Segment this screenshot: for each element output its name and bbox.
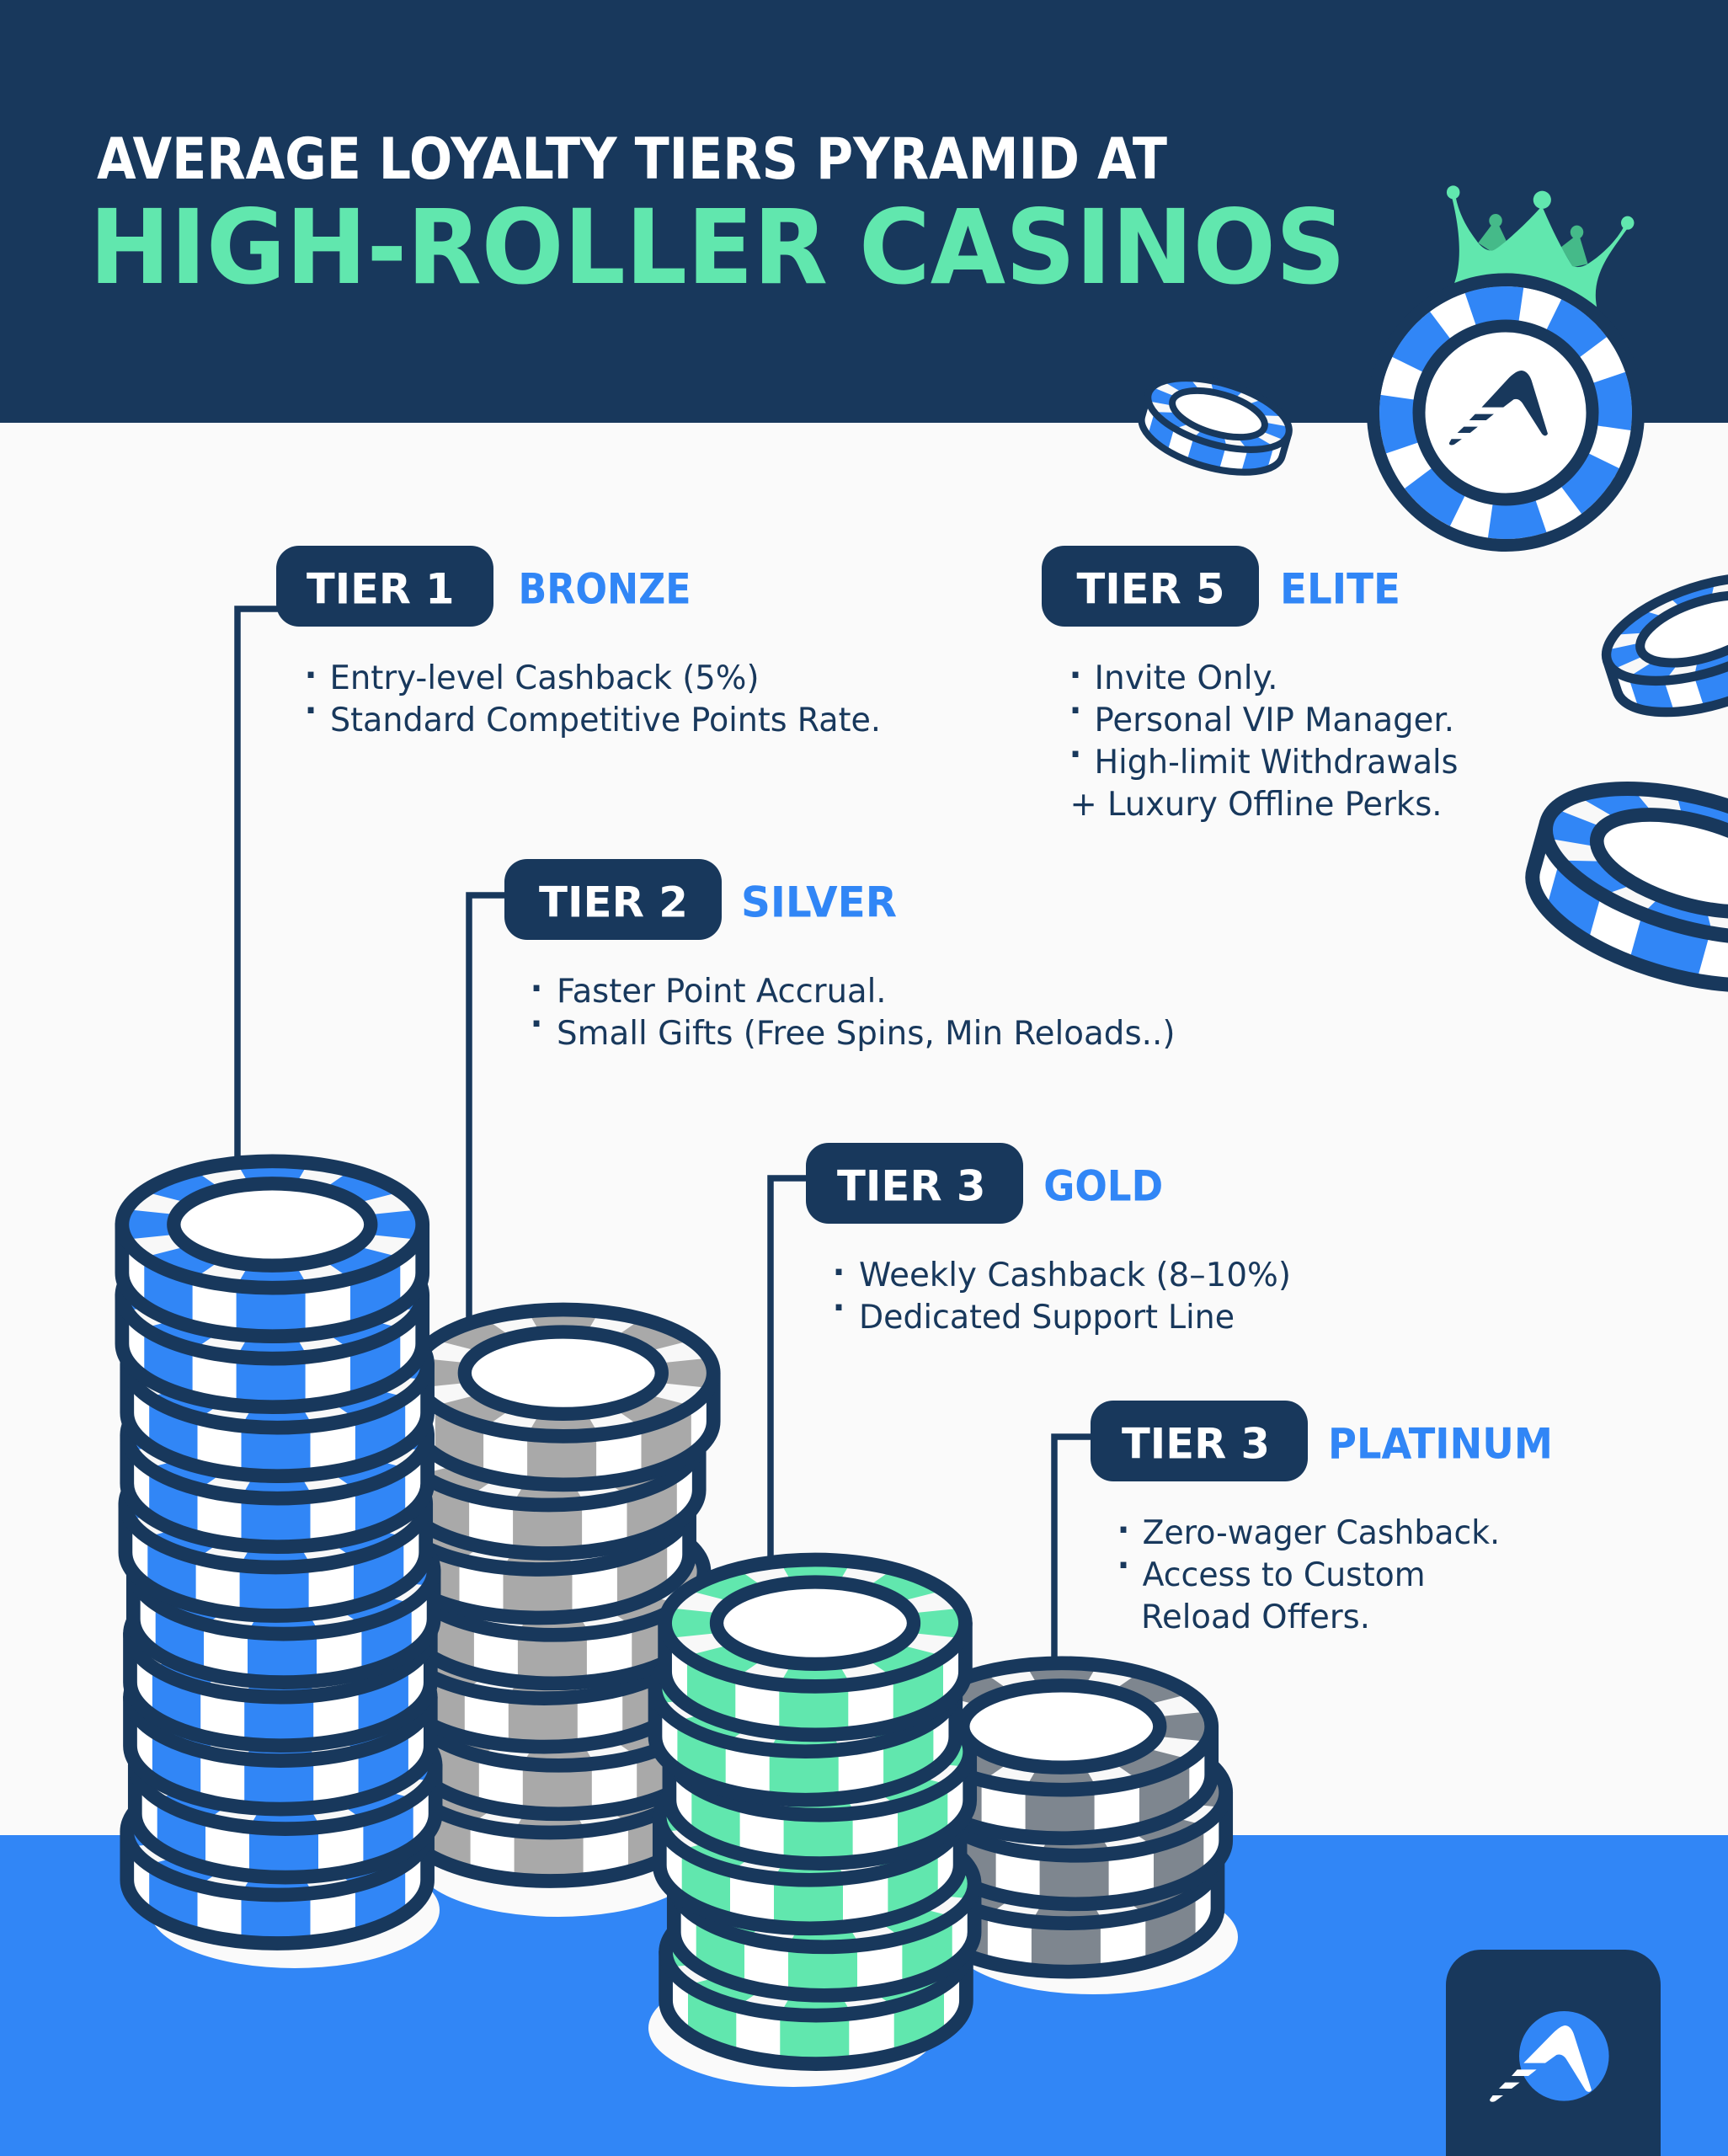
icon: lower right flying chip — [1514, 760, 1728, 1020]
shadow: bronze stack — [150, 1852, 440, 1968]
title — [89, 126, 1346, 307]
panel: tier 1 bronze — [276, 546, 881, 739]
benefits list: gold: Dedicated Support Line — [859, 1299, 1235, 1337]
badge label: tier 5: TIER 5 — [1076, 565, 1224, 614]
panel: tier 3 gold — [806, 1143, 1291, 1337]
badge label: tier 3 platinum: TIER 3 — [1122, 1420, 1270, 1469]
benefits list: silver: Faster Point Accrual. — [557, 973, 886, 1011]
benefits list: gold: · — [833, 1289, 845, 1327]
benefits list: gold: · — [833, 1254, 845, 1292]
badge: tier 3 platinum — [1091, 1401, 1308, 1481]
benefits list: silver: · — [531, 1006, 542, 1043]
connector: tier 3 gold — [771, 1178, 813, 1566]
tier name: gold: GOLD — [1043, 1162, 1163, 1211]
chip stack: bronze — [122, 1161, 435, 1950]
tier name: elite: ELITE — [1280, 565, 1400, 614]
panel: tier 2 silver — [504, 859, 1176, 1053]
badge: tier 5 — [1042, 546, 1259, 627]
chip stack: platinum — [911, 1663, 1226, 1977]
benefits list: platinum: Reload Offers. — [1141, 1598, 1370, 1636]
benefits list: bronze: · — [305, 657, 317, 695]
benefits list: silver — [531, 970, 1176, 1053]
benefits list: elite: Invite Only. — [1095, 659, 1278, 697]
icon: small flying chip — [1133, 365, 1297, 489]
badge label: tier 2: TIER 2 — [539, 878, 688, 927]
benefits list: silver: · — [531, 970, 542, 1008]
tier name: platinum: PLATINUM — [1328, 1420, 1553, 1469]
benefits list: elite: High-limit Withdrawals — [1095, 744, 1459, 782]
tier name: silver: SILVER — [741, 878, 897, 927]
benefits list: elite: · — [1069, 736, 1081, 774]
title line 2: CASINOS — [859, 188, 1346, 307]
blue ground band — [0, 1835, 1728, 2156]
connector: tier 3 platinum — [1054, 1437, 1095, 1663]
badge: tier 2 — [504, 859, 722, 940]
benefits list: platinum: Access to Custom — [1143, 1556, 1426, 1594]
shadow: platinum stack — [948, 1880, 1238, 1994]
tier name: bronze: BRONZE — [519, 565, 691, 614]
chip stack: gold — [655, 1560, 974, 2070]
badge: tier 1 — [276, 546, 493, 627]
benefits list: platinum: · — [1117, 1512, 1129, 1550]
benefits list: elite: · — [1069, 657, 1081, 695]
benefits list: bronze: Standard Competitive Points Rate. — [330, 702, 881, 739]
benefits list: platinum: · — [1117, 1547, 1129, 1585]
icon: upper right flying chip — [1594, 557, 1728, 737]
footer logo badge — [1446, 1950, 1661, 2156]
title line 2 — [89, 188, 1346, 307]
chip stack: silver — [389, 1310, 713, 1887]
badge label: tier 3 gold: TIER 3 — [837, 1162, 985, 1211]
shadow: gold stack — [648, 1969, 938, 2087]
badge: tier 3 gold — [806, 1143, 1023, 1224]
benefits list: gold — [833, 1254, 1291, 1337]
icon: large logo chip — [1373, 280, 1639, 546]
benefits list: elite — [1069, 657, 1459, 824]
icon: crown — [1447, 185, 1634, 307]
benefits list: gold: Weekly Cashback (8–10%) — [859, 1257, 1291, 1294]
title line 1: AVERAGE LOYALTY TIERS PYRAMID AT — [97, 126, 1168, 193]
panel: tier 5 elite — [1042, 546, 1459, 824]
panel: tier 3 platinum — [1091, 1401, 1553, 1636]
connector: tier 1 — [237, 609, 282, 1159]
benefits list: elite: · — [1069, 692, 1081, 730]
benefits list: bronze — [305, 657, 881, 739]
benefits list: elite: Personal VIP Manager. — [1095, 702, 1454, 739]
benefits list: bronze: · — [305, 692, 317, 730]
benefits list: platinum: Zero-wager Cashback. — [1143, 1514, 1500, 1552]
badge label: tier 1: TIER 1 — [307, 565, 455, 614]
title line 2: HIGH-ROLLER — [89, 188, 828, 307]
benefits list: bronze: Entry-level Cashback (5%) — [330, 659, 760, 697]
shadow: silver stack — [413, 1801, 703, 1917]
benefits list: platinum — [1117, 1512, 1500, 1636]
benefits list: elite: + Luxury Offline Perks. — [1069, 786, 1442, 824]
benefits list: silver: Small Gifts (Free Spins, Min Reloads..) — [557, 1015, 1176, 1053]
connector: tier 2 — [469, 895, 509, 1322]
header band — [0, 0, 1728, 423]
